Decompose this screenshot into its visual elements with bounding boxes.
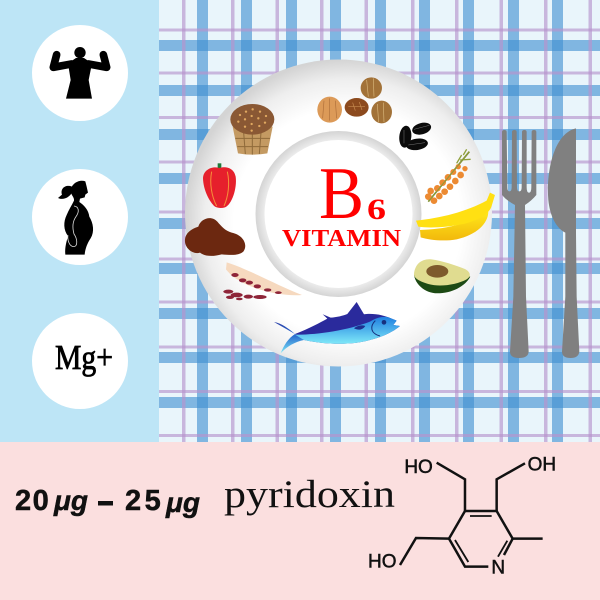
fish — [274, 302, 400, 353]
dosage text: 20 — [15, 485, 50, 517]
beans — [223, 262, 302, 300]
knife — [548, 128, 579, 358]
chemical structure — [368, 455, 556, 578]
icon: Mg+: Mg+ — [55, 338, 113, 377]
nuts — [317, 77, 392, 123]
sea buckthorn — [425, 149, 471, 204]
pyridoxin label: pyridoxin — [224, 473, 395, 516]
avocado — [414, 259, 470, 293]
chemical structure: N — [491, 557, 505, 578]
banana — [416, 193, 495, 240]
panel: dosage strip — [0, 442, 600, 600]
icon: muscular man — [32, 25, 128, 121]
liver — [185, 218, 245, 256]
icon: Mg+ — [32, 313, 128, 409]
title: B6 vitamin: VITAMIN — [282, 226, 402, 252]
tablecloth background — [159, 0, 600, 442]
title: B6 vitamin — [282, 153, 402, 252]
sunflower seeds — [398, 121, 432, 151]
chemical structure: HO — [368, 551, 396, 572]
foods — [185, 77, 495, 353]
dosage text: 25 — [125, 485, 164, 517]
dosage text: μg — [165, 487, 200, 518]
fork — [502, 130, 536, 358]
chemical structure: OH — [528, 455, 556, 476]
panel: left benefits column — [0, 0, 159, 442]
icon: pregnant woman — [32, 169, 128, 265]
dosage text — [15, 485, 200, 518]
dosage text: μg — [53, 485, 88, 516]
inner ring — [256, 131, 422, 297]
muffin — [230, 104, 274, 155]
red pepper — [203, 163, 236, 208]
title: B6 vitamin: B — [319, 153, 364, 235]
title: B6 vitamin: 6 — [367, 193, 386, 226]
plate — [185, 60, 495, 366]
chemical structure: HO — [404, 457, 433, 478]
